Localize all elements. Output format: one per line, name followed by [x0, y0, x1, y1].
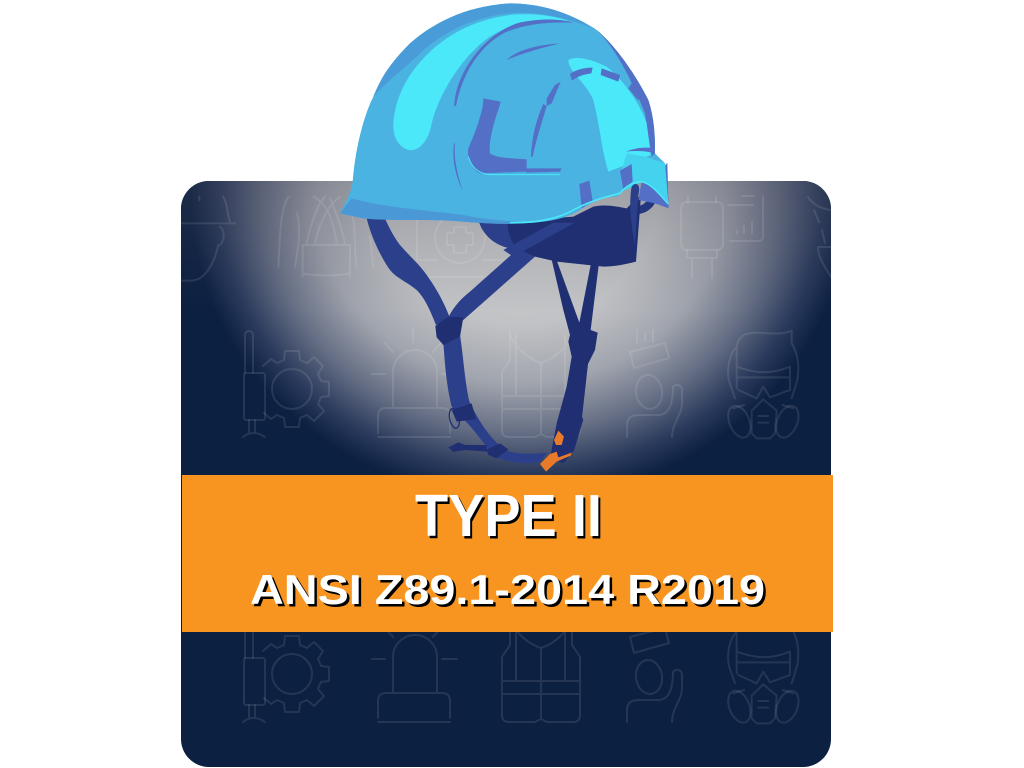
highlight right — [568, 58, 651, 172]
long arc vent — [454, 19, 573, 106]
icon: harness — [278, 197, 373, 277]
buckles — [448, 403, 508, 458]
strap overlap — [503, 223, 575, 257]
inner pad lobe — [478, 220, 517, 249]
left strap — [367, 218, 451, 325]
rim highlight line — [510, 182, 668, 223]
chin straps — [367, 218, 599, 472]
icon row: bottom — [242, 632, 800, 724]
back pad — [508, 197, 641, 267]
L vent — [468, 98, 527, 173]
orange clip — [540, 431, 572, 472]
icon: device and chart — [681, 196, 763, 278]
shell — [340, 3, 668, 224]
spotlight glow — [181, 181, 831, 475]
helmet — [340, 3, 669, 267]
title: TYPE II: TYPE II — [417, 486, 604, 552]
highlight left — [393, 14, 570, 150]
right Y strap — [550, 257, 599, 463]
indigo vents — [453, 19, 655, 208]
brim flap — [621, 153, 668, 203]
background safety icons — [182, 196, 831, 726]
dashes — [570, 68, 593, 81]
upper slit — [507, 43, 560, 60]
subtitle: standard: ANSI Z89.1-2014 R2019 — [252, 568, 768, 616]
top darker band — [373, 3, 597, 97]
icon: hard hat worker — [182, 197, 235, 281]
icon: medical — [417, 213, 503, 277]
indigo rear brim — [638, 163, 669, 208]
icon: alarm lamp — [371, 339, 451, 438]
infographic — [181, 3, 833, 767]
lower strap — [443, 335, 547, 463]
right strap — [449, 223, 574, 320]
rear ring — [630, 185, 654, 210]
title: TYPE II: TYPE II — [415, 483, 602, 549]
icon: gear — [243, 331, 329, 437]
subtitle: standard: ANSI Z89.1-2014 R2019 — [250, 566, 765, 613]
icon: partial right edge — [808, 197, 831, 277]
panel: dark navy card — [181, 181, 831, 767]
icon: respirator mask — [724, 331, 803, 441]
front strap at ear — [630, 184, 639, 245]
right side rim — [597, 30, 655, 157]
bottom rim band — [340, 198, 533, 224]
icon: safety vest — [501, 365, 581, 438]
icon: person with card — [627, 330, 682, 437]
orange title band — [182, 475, 833, 632]
strap knot — [435, 317, 463, 345]
